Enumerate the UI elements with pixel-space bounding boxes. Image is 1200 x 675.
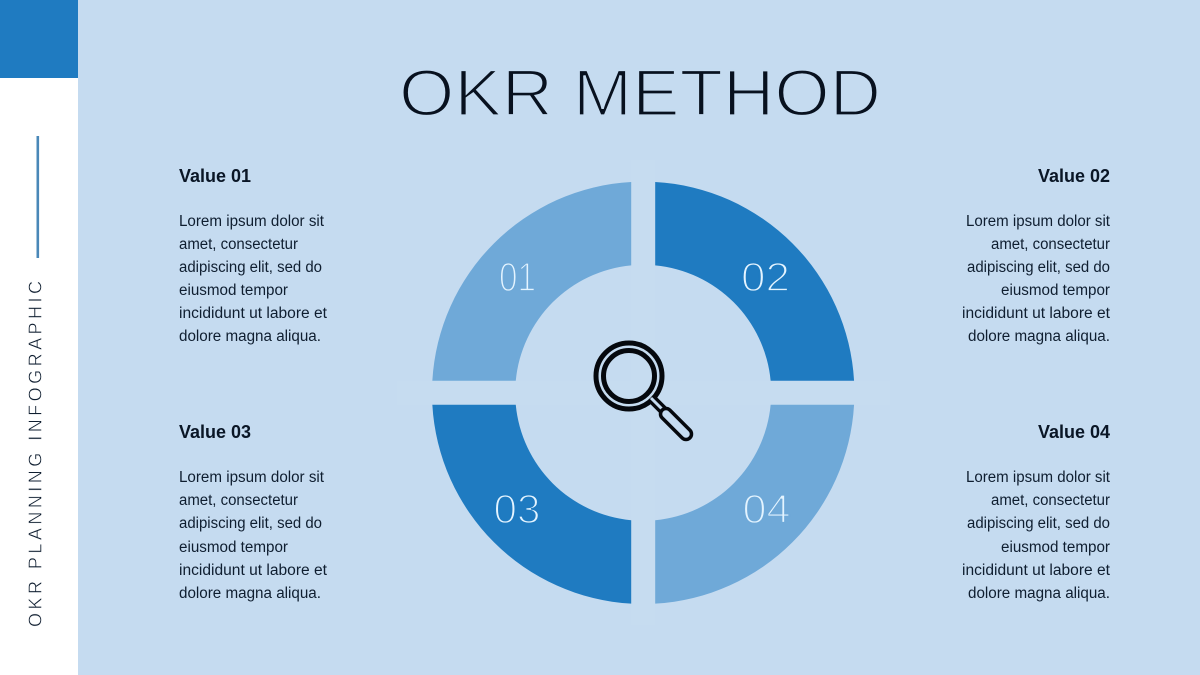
chart: segmented ring	[397, 160, 890, 625]
body: value 02: eiusmod tempor	[1001, 282, 1110, 299]
body: value 02: amet, consectetur	[991, 236, 1110, 253]
panel: left sidebar	[0, 0, 78, 675]
body: value 01: incididunt ut labore et	[179, 305, 328, 322]
body: value 01: Lorem ipsum dolor sit	[179, 213, 325, 230]
body: value 03	[179, 469, 328, 602]
blue corner square	[0, 0, 78, 78]
body: value 03: eiusmod tempor	[179, 539, 288, 556]
heading: value 02: Value 02	[1038, 165, 1110, 186]
body: value 03: amet, consectetur	[179, 492, 298, 509]
sidebar vertical label: OKR PLANNING INFOGRAPHIC	[26, 281, 46, 627]
title: OKR METHOD	[399, 56, 881, 130]
body: value 01: adipiscing elit, sed do	[179, 259, 322, 276]
body: value 02	[962, 213, 1111, 345]
segment 02	[655, 182, 854, 381]
body: value 04	[962, 469, 1111, 602]
body: value 04: incididunt ut labore et	[962, 562, 1111, 579]
body: value 03: adipiscing elit, sed do	[179, 515, 322, 532]
segment 01: 01	[499, 254, 536, 300]
segment 01	[432, 182, 631, 381]
segment 04	[655, 405, 854, 604]
body: value 01: eiusmod tempor	[179, 282, 288, 299]
body: value 04: eiusmod tempor	[1001, 539, 1110, 556]
segment 04: 04	[742, 486, 790, 532]
body: value 01: amet, consectetur	[179, 236, 298, 253]
body: value 02: dolore magna aliqua.	[968, 328, 1110, 345]
segment 03: 03	[494, 486, 540, 532]
body: value 04: amet, consectetur	[991, 492, 1110, 509]
body: value 03: incididunt ut labore et	[179, 562, 328, 579]
body: value 02: incididunt ut labore et	[962, 305, 1111, 322]
panel: value 04 text	[962, 421, 1111, 602]
body: value 02: Lorem ipsum dolor sit	[966, 213, 1111, 230]
panel: value 01 text	[179, 165, 328, 345]
panel: value 02 text	[962, 165, 1111, 345]
body: value 02: adipiscing elit, sed do	[967, 259, 1110, 276]
panel: value 03 text	[179, 421, 328, 602]
body: value 01: dolore magna aliqua.	[179, 328, 321, 345]
body: value 04: adipiscing elit, sed do	[967, 515, 1110, 532]
segment 02: 02	[741, 254, 790, 300]
body: value 03: Lorem ipsum dolor sit	[179, 469, 325, 486]
body: value 04: Lorem ipsum dolor sit	[966, 469, 1111, 486]
body: value 04: dolore magna aliqua.	[968, 585, 1110, 602]
body: value 01	[179, 213, 328, 345]
body: value 03: dolore magna aliqua.	[179, 585, 321, 602]
icon: magnifying glass	[596, 343, 686, 434]
segment 03	[432, 405, 631, 604]
heading: value 03: Value 03	[179, 421, 251, 442]
heading: value 01: Value 01	[179, 165, 251, 186]
sidebar accent line	[36, 136, 39, 258]
heading: value 04: Value 04	[1038, 421, 1111, 442]
